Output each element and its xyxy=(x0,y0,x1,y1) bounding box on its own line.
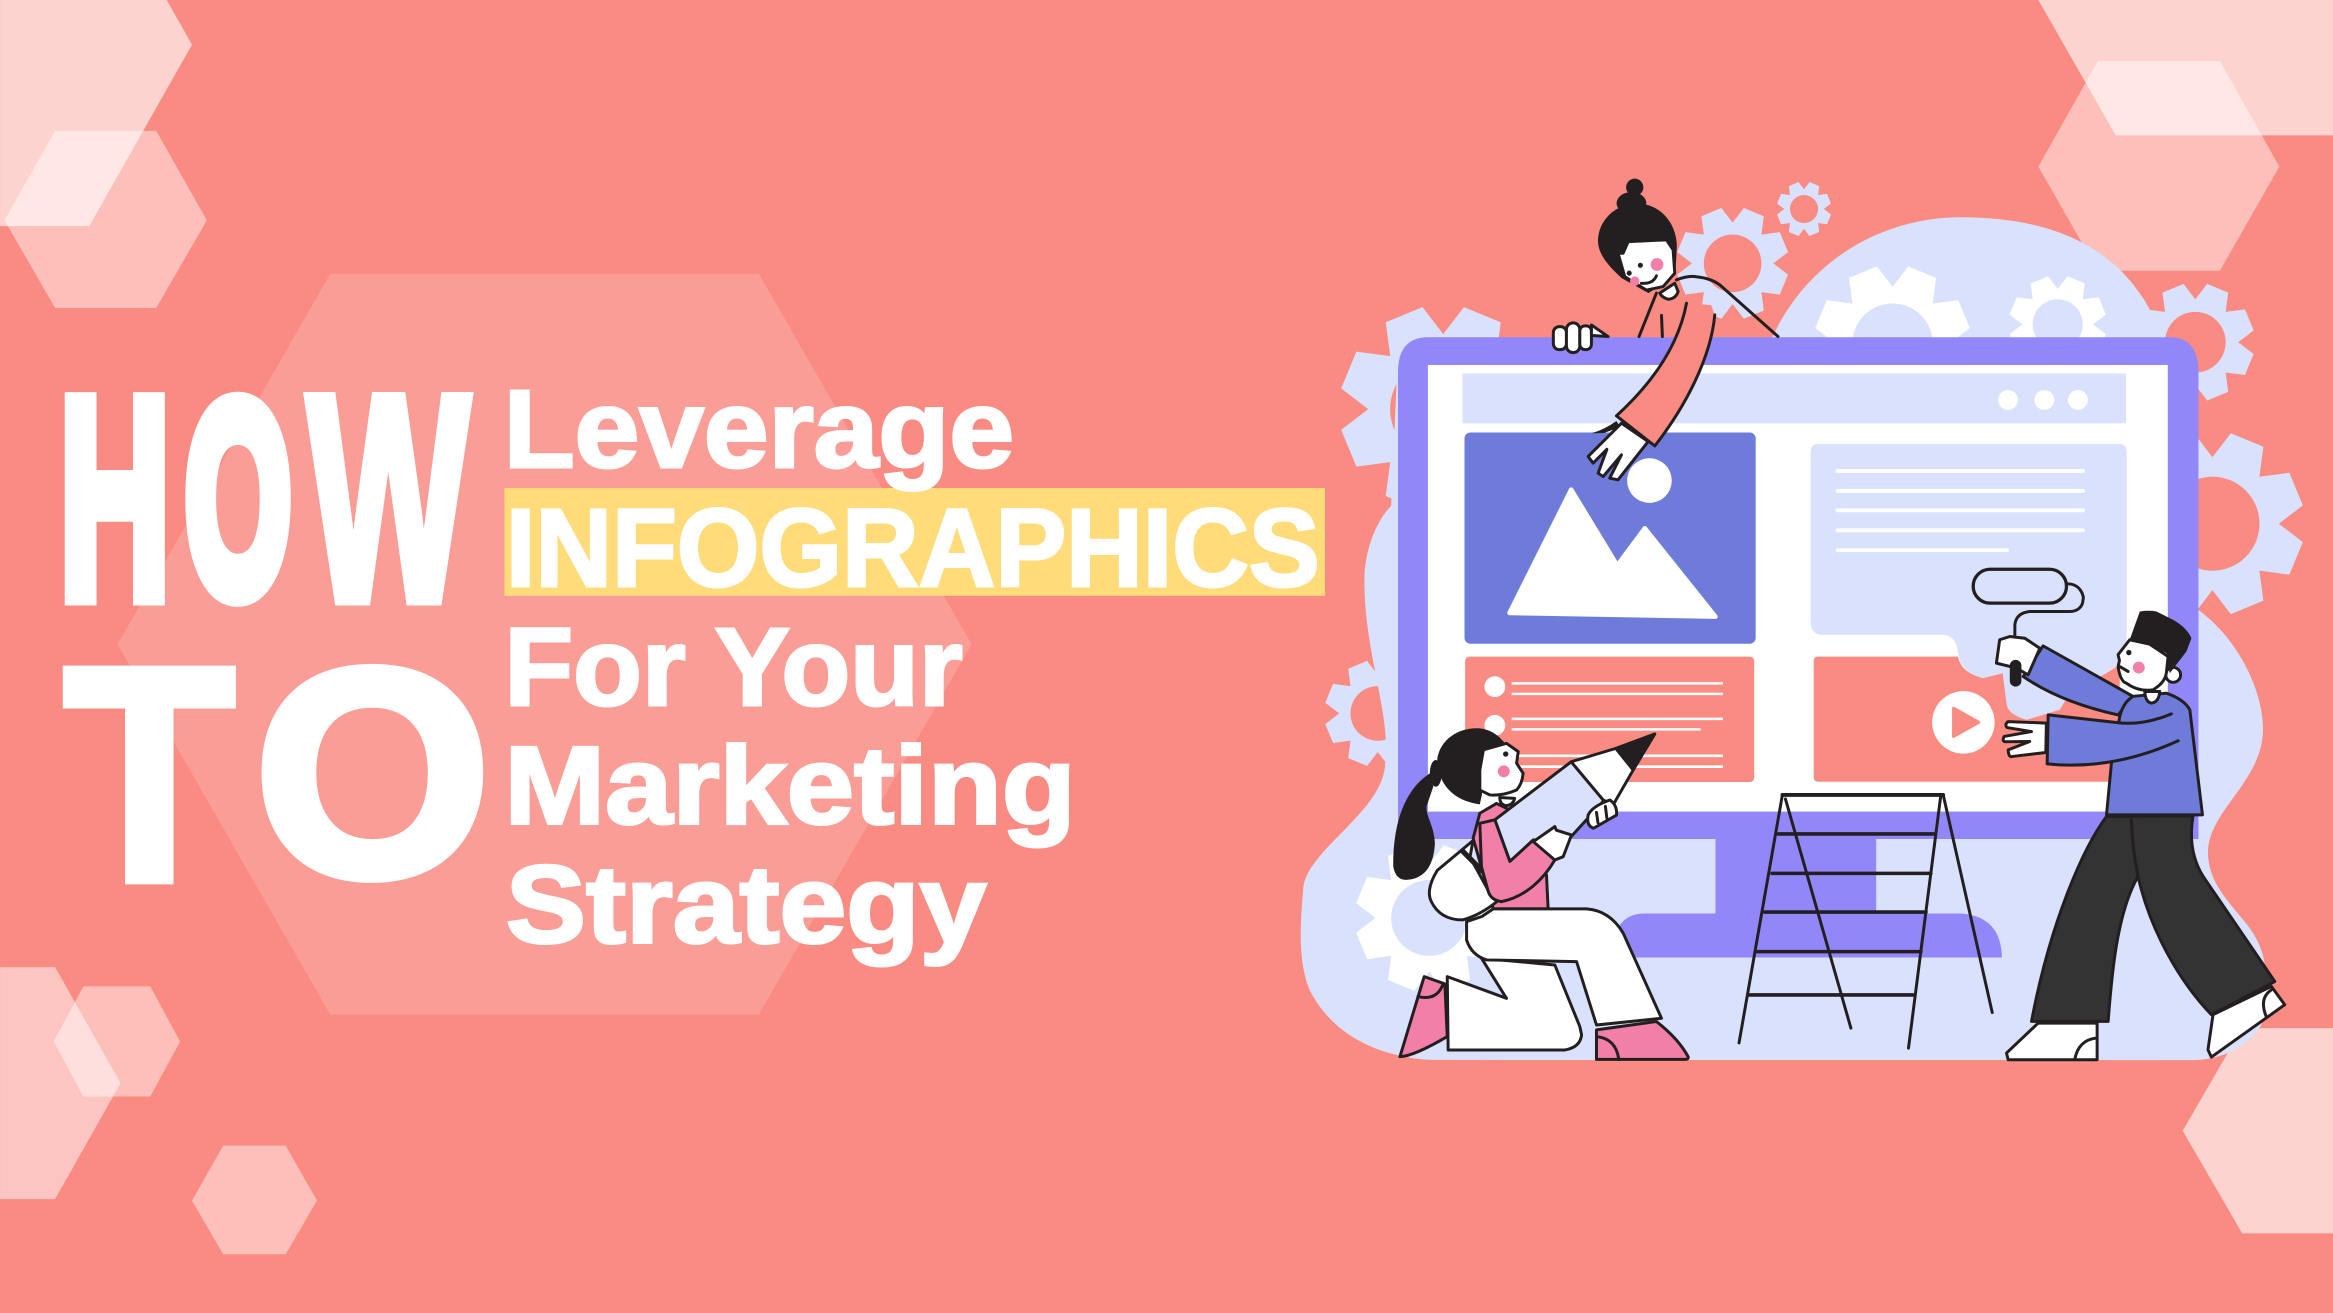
face xyxy=(1618,240,1675,290)
title: HOW TO: O xyxy=(254,609,491,938)
video card xyxy=(1814,657,2120,782)
icon: sun xyxy=(1627,458,1672,503)
torso xyxy=(2107,693,2202,815)
body and shoulder xyxy=(1639,276,1778,337)
forward hand xyxy=(2003,722,2046,757)
heading: Leverage Infographics For Your Marketing Strategy xyxy=(504,368,1325,967)
highlight behind INFOGRAPHICS xyxy=(504,488,1325,596)
monitor frame xyxy=(1398,337,2198,839)
raised arm xyxy=(2023,646,2133,715)
thigh xyxy=(1467,909,1661,1025)
right shoe xyxy=(2208,986,2285,1057)
character: man with paint roller xyxy=(1973,569,2285,1060)
torso xyxy=(1473,803,1548,909)
raised hand xyxy=(1996,636,2040,675)
title: HOW TO: H xyxy=(59,341,170,658)
hair xyxy=(2130,611,2191,673)
roller xyxy=(1973,569,2083,687)
hair xyxy=(1437,728,1504,804)
image card xyxy=(1465,433,1756,644)
head xyxy=(2118,640,2168,690)
icon: play button xyxy=(1932,691,1995,754)
heading: Leverage Infographics For Your Marketing Strategy: Strategy xyxy=(506,844,986,967)
lower leg xyxy=(1447,958,1582,1050)
reaching arm xyxy=(1616,303,1715,446)
lavender blob xyxy=(1301,217,2268,1060)
rear boot xyxy=(1400,977,1447,1057)
text card xyxy=(1811,444,2127,720)
illustration: website being built xyxy=(1301,179,2303,1060)
ponytail xyxy=(1393,773,1435,880)
screen xyxy=(1428,365,2168,812)
hand gripping the monitor xyxy=(1553,323,1608,353)
front boot xyxy=(1596,1022,1688,1059)
arm xyxy=(1480,820,1555,902)
heading: Leverage Infographics For Your Marketing Strategy: Leverage xyxy=(504,368,1014,491)
face xyxy=(1480,743,1523,795)
heading: Leverage Infographics For Your Marketing Strategy: For Your xyxy=(504,606,963,729)
ear xyxy=(2166,667,2181,682)
character: woman kneeling with pencil xyxy=(1393,728,1688,1059)
heading: Leverage Infographics For Your Marketing Strategy: INFOGRAPHICS xyxy=(506,487,1320,610)
monitor stand xyxy=(1616,833,2002,958)
list card xyxy=(1465,657,1754,782)
hair xyxy=(1598,179,1677,293)
heading: Leverage Infographics For Your Marketing Strategy: Marketing xyxy=(504,725,1076,848)
forward arm xyxy=(2047,714,2178,765)
hands xyxy=(1533,800,1617,860)
left shoe xyxy=(2007,1023,2097,1060)
title: HOW TO: W xyxy=(307,336,471,663)
character: woman leaning over the monitor xyxy=(1553,179,1778,480)
lavender gears behind the blob xyxy=(1325,182,2303,766)
neck xyxy=(1500,797,1515,806)
white bag xyxy=(1429,841,1497,920)
title: HOW TO: T xyxy=(64,604,235,945)
neck xyxy=(1660,283,1678,299)
browser address bar xyxy=(1463,373,2126,423)
neck xyxy=(2145,692,2160,703)
title: HOW TO xyxy=(59,336,491,945)
trousers xyxy=(2032,816,2275,1021)
title: HOW TO: O xyxy=(185,347,291,651)
ladder xyxy=(1739,794,1992,1048)
icon: mountains xyxy=(1509,489,1716,617)
reaching hand xyxy=(1588,421,1648,480)
white gears on the blob xyxy=(1356,266,2106,991)
pencil xyxy=(1495,734,1655,861)
